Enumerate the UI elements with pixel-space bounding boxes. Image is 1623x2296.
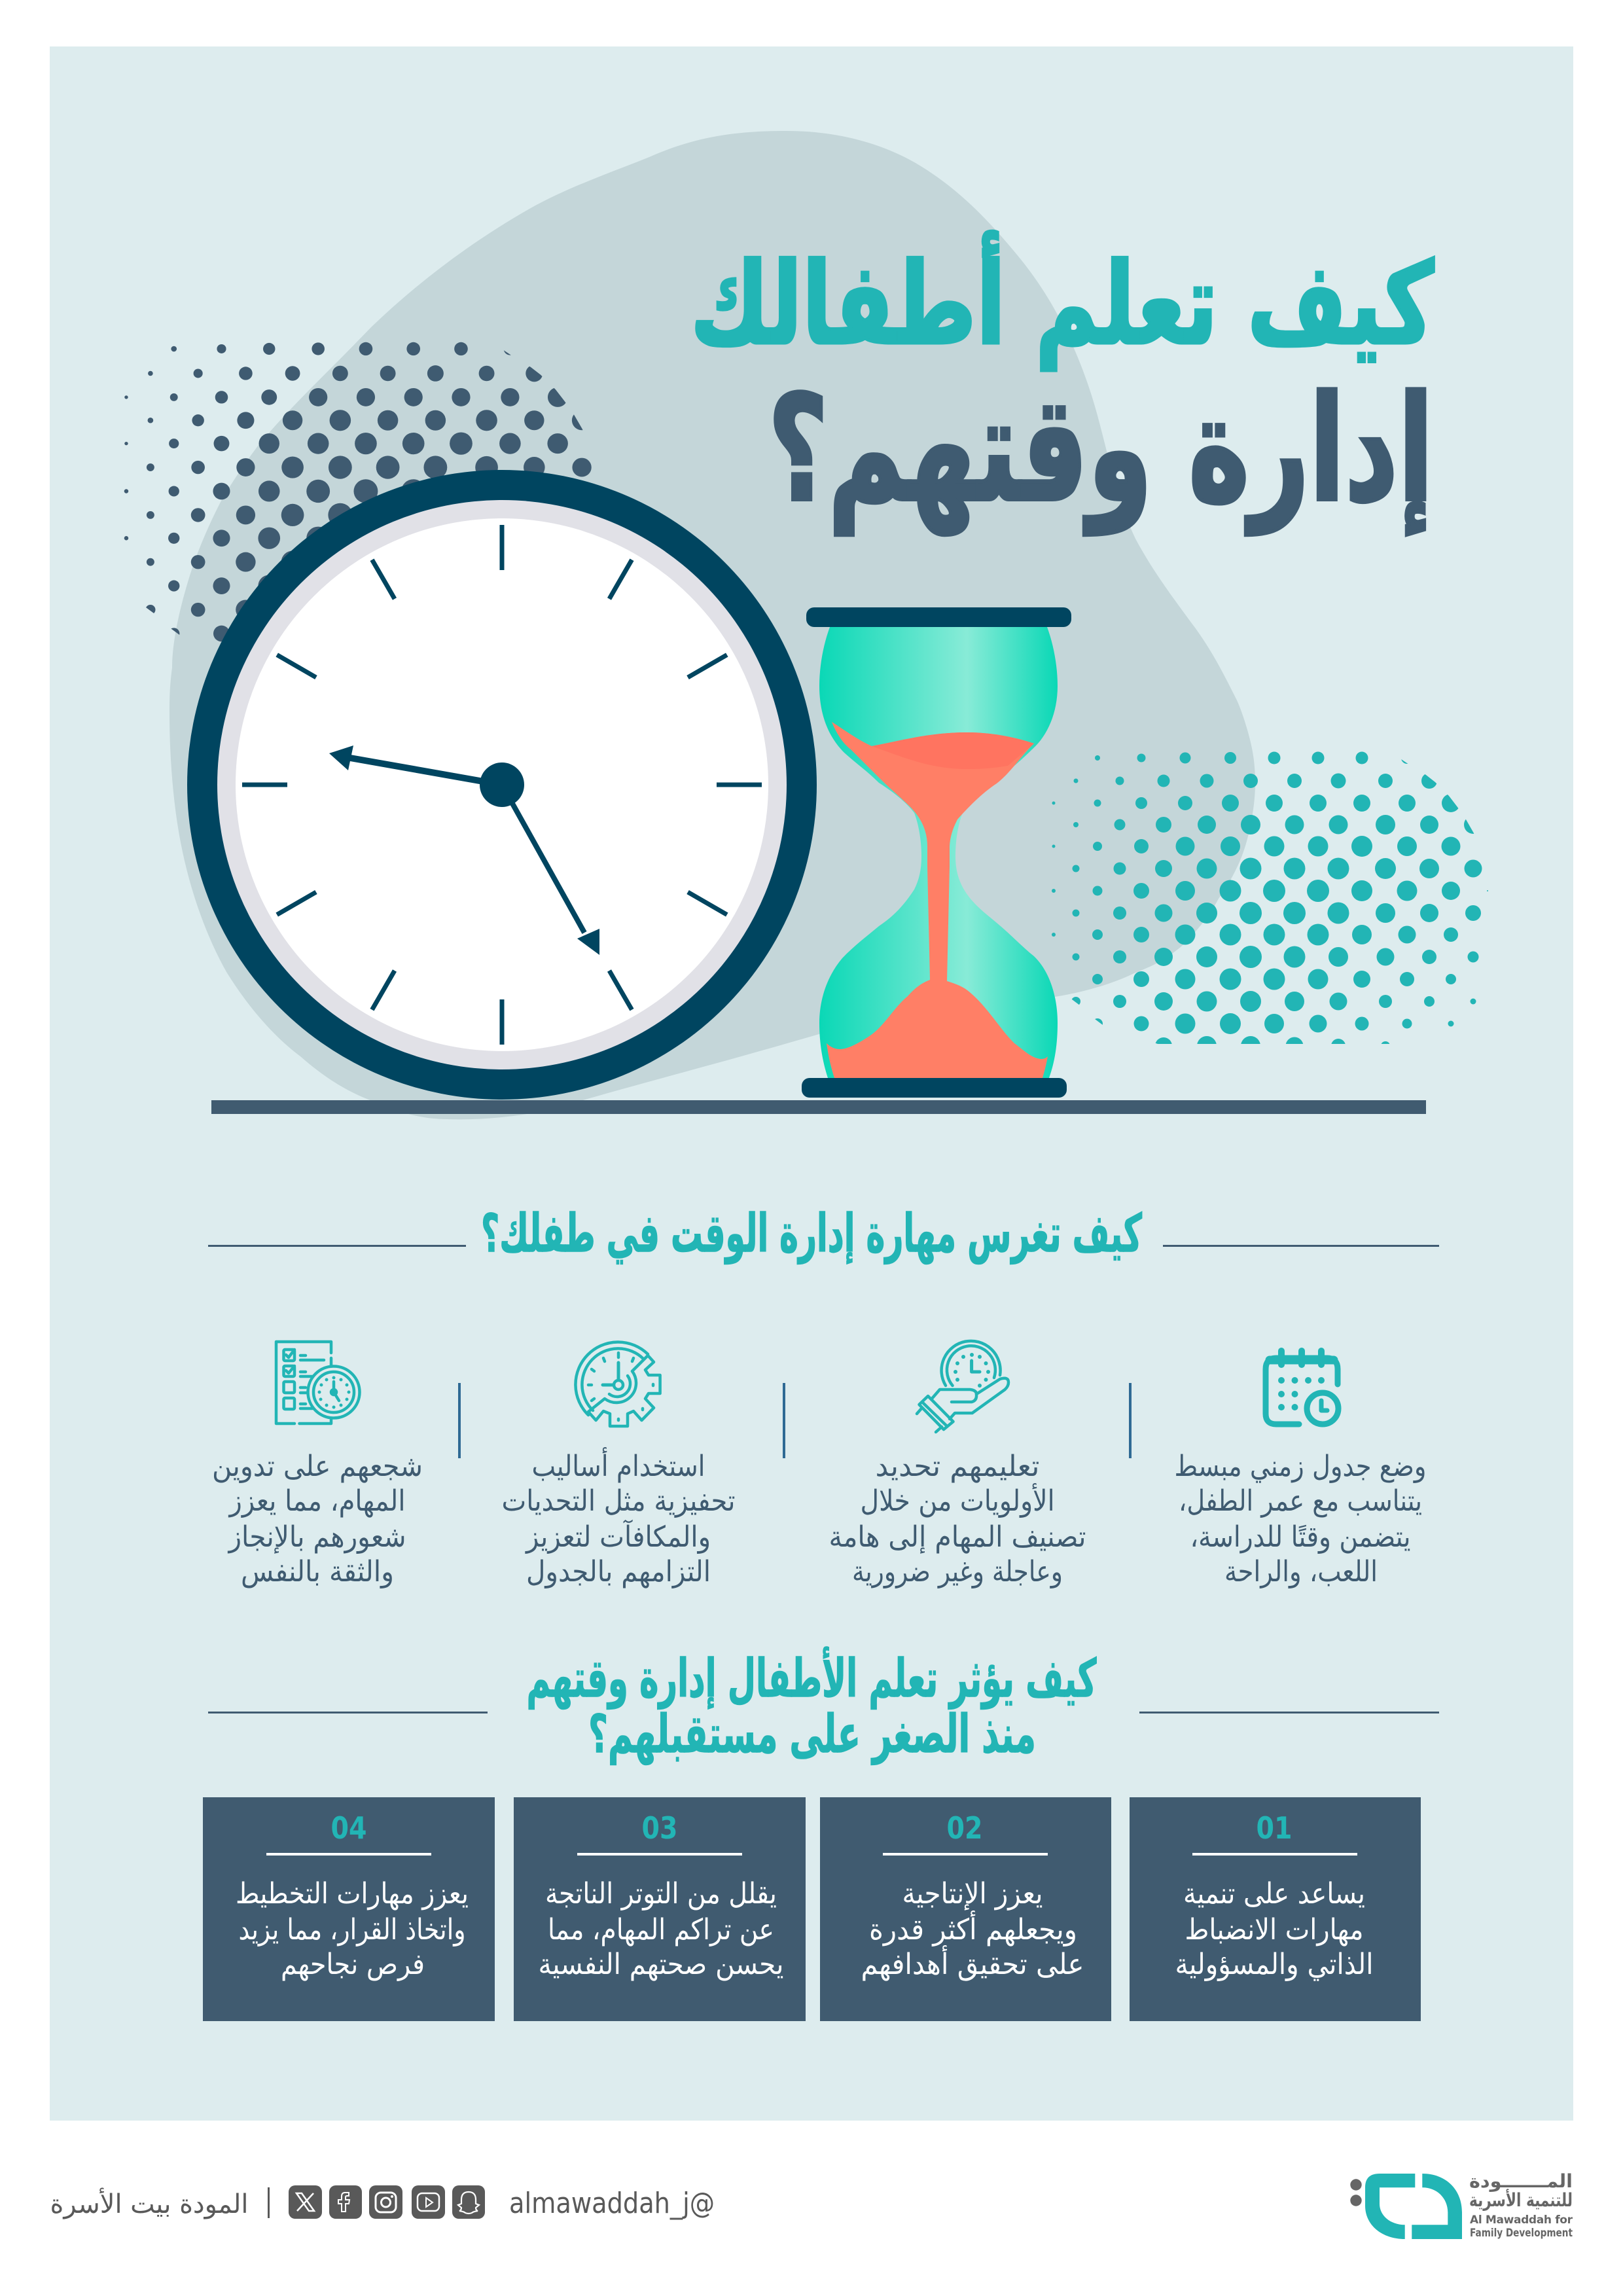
clock hand: long left	[329, 745, 502, 785]
tip text: priorities	[829, 1450, 1086, 1588]
clock hub	[480, 762, 524, 807]
card 04: فرص نجاحهم	[281, 1948, 425, 1981]
tip text: motivation	[501, 1447, 736, 1588]
card 01	[1130, 1797, 1421, 2021]
tip text: writing tasks: شجعهم على تدوين	[212, 1450, 423, 1483]
icon: facebook	[329, 2185, 362, 2219]
social handle: almawaddah_j@	[509, 2187, 715, 2220]
logo text: Family Development	[1470, 2227, 1573, 2240]
logo text: المـــــــودة	[1469, 2170, 1573, 2192]
icon: youtube	[412, 2185, 445, 2219]
icon: checklist with clock	[276, 1342, 360, 1424]
tip text: schedule: يتناسب مع عمر الطفل،	[1179, 1484, 1422, 1518]
shelf	[211, 1100, 1426, 1114]
top cap	[806, 607, 1071, 627]
card 02: 02	[946, 1810, 983, 1846]
sand surface	[872, 732, 1034, 769]
bottom cap	[802, 1078, 1067, 1098]
card 03: عن تراكم المهام، مما	[548, 1913, 774, 1946]
heading text line 2: منذ الصغر على مستقبلهم؟	[588, 1704, 1036, 1765]
clock hand: lower right	[502, 785, 599, 955]
card 02: ويجعلهم أكثر قدرة	[869, 1910, 1077, 1946]
tip text: priorities: الأولويات من خلال	[860, 1482, 1055, 1518]
hourglass	[802, 607, 1071, 1098]
tip text: writing tasks: المهام، مما يعزز	[228, 1484, 406, 1518]
halftone dots: dark left	[124, 342, 598, 668]
tip text: writing tasks	[212, 1450, 423, 1588]
icon: calendar	[1266, 1351, 1338, 1424]
card 01: مهارات الانضباط	[1185, 1913, 1364, 1946]
logo text: للتنمية الأسرية	[1469, 2189, 1573, 2211]
separators	[458, 1383, 1132, 1458]
icon: instagram	[369, 2185, 402, 2219]
clock	[187, 470, 817, 1100]
tip text: writing tasks: شعورهم بالإنجاز	[228, 1520, 406, 1554]
card 04: 04	[331, 1810, 366, 1846]
logo mark	[1365, 2174, 1462, 2239]
heading text: كيف يؤثر تعلم الأطفال إدارة وقتهم	[526, 1647, 1097, 1710]
heading rule left	[208, 1245, 466, 1247]
card 01: يساعد على تنمية	[1183, 1877, 1365, 1910]
clock ticks	[242, 525, 762, 1045]
card 03: يحسن صحتهم النفسية	[538, 1948, 784, 1981]
tip text: schedule: اللعب، والراحة	[1224, 1555, 1378, 1588]
logo	[1350, 2170, 1573, 2240]
heading rule right	[1139, 1712, 1439, 1713]
sand	[827, 722, 1048, 1078]
footer slogan: المودة بيت الأسرة	[50, 2187, 249, 2219]
logo text	[1469, 2170, 1573, 2240]
logo dots	[1350, 2179, 1362, 2206]
card 04: يعزز مهارات التخطيط	[236, 1877, 469, 1910]
card 02	[820, 1797, 1111, 2021]
heading text: كيف تغرس مهارة إدارة الوقت في طفلك؟	[481, 1203, 1142, 1265]
logo text: Al Mawaddah for	[1470, 2214, 1573, 2227]
title	[690, 231, 1435, 535]
card 04	[203, 1797, 495, 2021]
tip text: priorities: تصنيف المهام إلى هامة	[829, 1520, 1086, 1554]
card 04: واتخاذ القرار، مما يزيد	[238, 1913, 466, 1946]
tip text: schedule	[1174, 1450, 1427, 1588]
icon: gear clock	[575, 1342, 660, 1426]
glass	[819, 627, 1058, 1078]
card 02: يعزز الإنتاجية	[902, 1877, 1043, 1910]
card 01: 01	[1257, 1810, 1292, 1846]
heading: how to instill	[208, 1203, 1439, 1265]
tip text: priorities: تعليمهم تحديد	[876, 1450, 1039, 1483]
tip text: motivation: تحفيزية مثل التحديات	[501, 1484, 736, 1518]
background blob	[169, 131, 1255, 1119]
card 03: يقلل من التوتر الناتجة	[545, 1877, 777, 1910]
tip text: priorities: وعاجلة وغير ضرورية	[852, 1555, 1063, 1588]
tip text: schedule: وضع جدول زمني مبسط	[1174, 1450, 1427, 1483]
tip text: writing tasks: والثقة بالنفس	[241, 1555, 394, 1588]
icon: clock on hand	[917, 1341, 1008, 1432]
card 03	[514, 1797, 806, 2021]
icon: X	[289, 2185, 322, 2219]
heading: impact on future	[208, 1647, 1439, 1765]
card 01: الذاتي والمسؤولية	[1175, 1948, 1373, 1981]
clock face	[236, 518, 768, 1051]
icon: snapchat	[452, 2185, 485, 2219]
tip text: motivation: استخدام أساليب	[531, 1447, 705, 1483]
footer separator	[268, 2187, 270, 2218]
clock rim	[187, 470, 817, 1100]
tip text: motivation: والمكافآت لتعزيز	[525, 1519, 711, 1554]
tip text: schedule: يتضمن وقتًا للدراسة،	[1190, 1520, 1411, 1554]
heading rule left	[208, 1712, 488, 1713]
clock inner ring	[217, 500, 787, 1069]
heading rule right	[1163, 1245, 1439, 1247]
card 02: على تحقيق أهدافهم	[861, 1945, 1084, 1981]
card 03: 03	[641, 1810, 678, 1846]
halftone dots: teal right	[1052, 751, 1488, 1056]
tip text: motivation: التزامهم بالجدول	[526, 1555, 711, 1588]
